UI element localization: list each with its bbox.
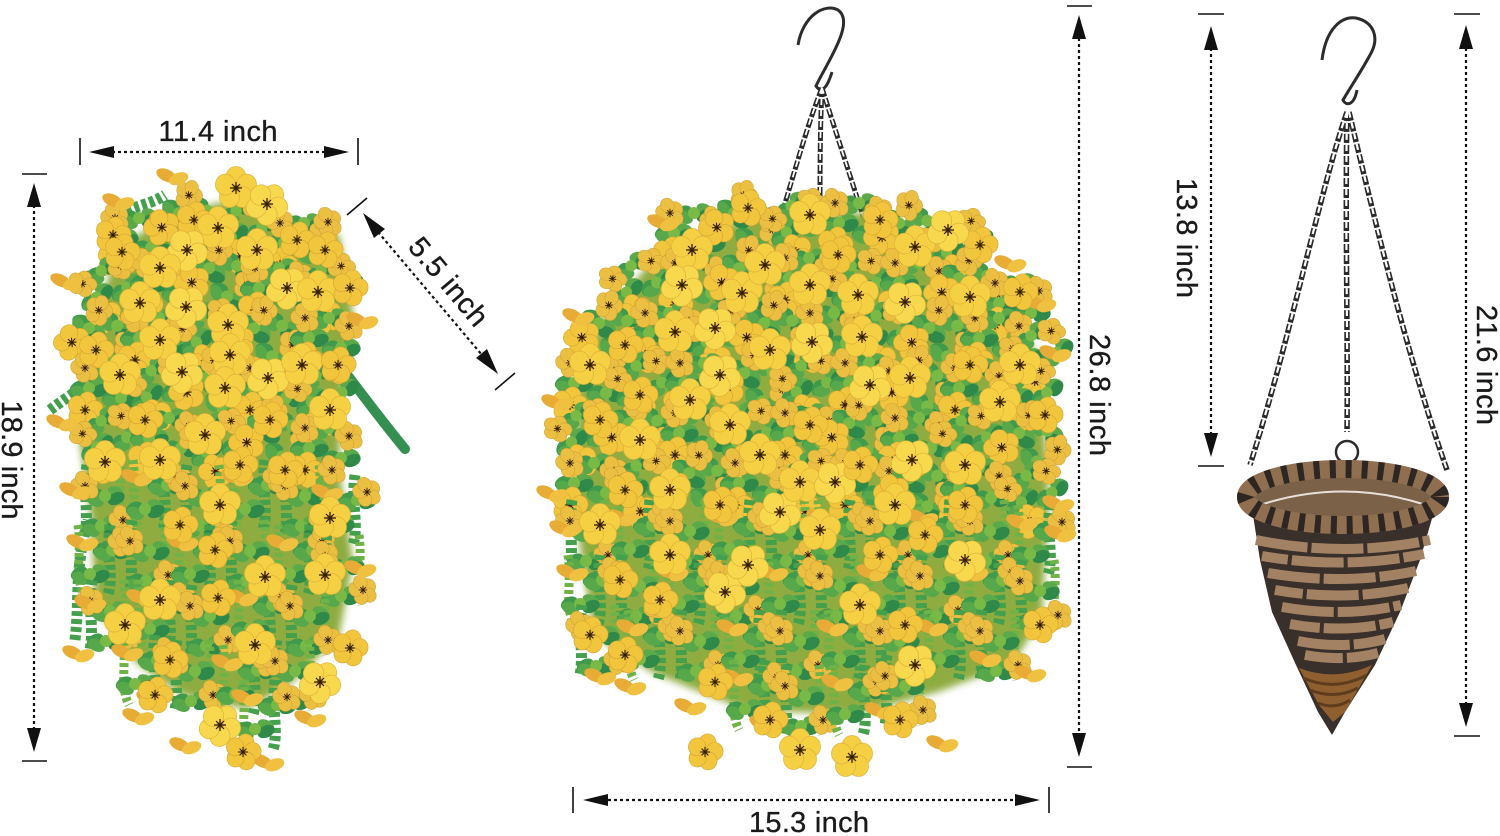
dimension: 11.4 inch width xyxy=(80,116,358,165)
dimension: 15.3 inch width xyxy=(573,787,1049,836)
dimension: 26.8 inch height xyxy=(1067,6,1115,767)
right wicker cone basket xyxy=(1246,18,1447,735)
dimension: 11.4 inch width: 11.4 inch xyxy=(158,116,278,148)
yellow flowers xyxy=(44,165,380,774)
rope tip xyxy=(1299,665,1372,722)
dimension: 13.8 inch basket xyxy=(1170,14,1224,466)
yellow flowers xyxy=(534,186,1078,777)
rim xyxy=(1246,469,1440,525)
dimension: 13.8 inch basket: 13.8 inch xyxy=(1170,178,1202,298)
cone body xyxy=(1253,515,1433,735)
side stems xyxy=(50,195,165,640)
dimension: 18.9 inch height xyxy=(0,174,47,761)
dimension: 5.5 inch depth: 5.5 inch xyxy=(402,231,494,333)
hook and chains xyxy=(1250,18,1447,470)
dense foliage and blossoms xyxy=(530,166,1096,740)
dimension: 21.6 inch total xyxy=(1454,14,1500,736)
dense foliage and blossoms xyxy=(42,166,387,750)
dimension: 26.8 inch height: 26.8 inch xyxy=(1083,334,1115,456)
green stake xyxy=(345,372,405,449)
center hanging basket with flowers xyxy=(530,8,1096,776)
dimension: 5.5 inch depth xyxy=(347,198,515,390)
hook and chains xyxy=(772,8,872,245)
left hanging plant xyxy=(42,165,405,774)
